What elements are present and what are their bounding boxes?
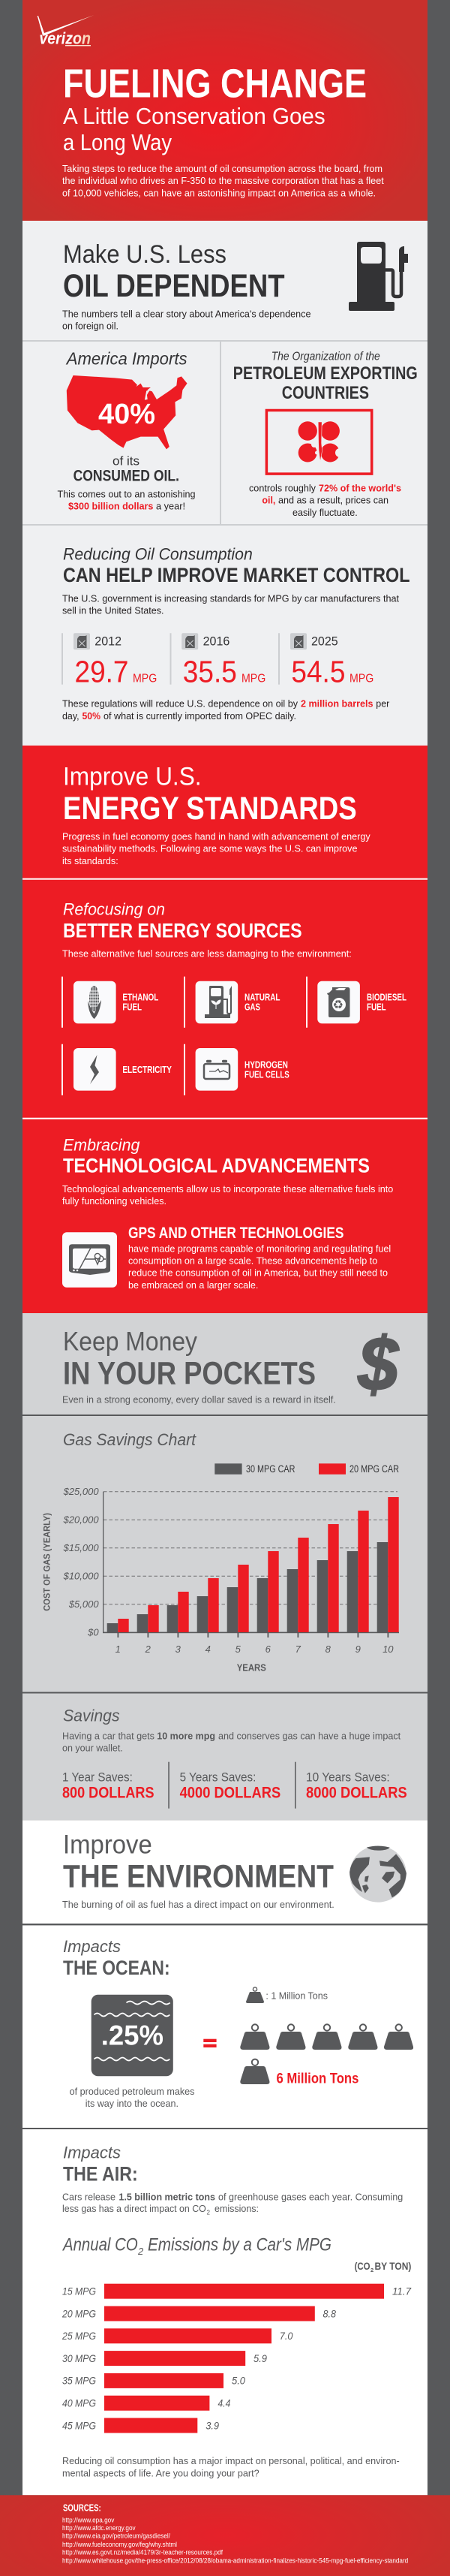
- text block: 1.5 billion metric tons: [118, 2191, 215, 2202]
- bar chart: CO2 emissions: 35 MPG: [62, 2375, 96, 2387]
- icon: fuel pump: [349, 242, 408, 311]
- bar chart: CO2 emissions: 45 MPG: [62, 2419, 96, 2431]
- stat: 2012: [62, 633, 157, 688]
- panel: savings: [62, 1707, 407, 1809]
- bar chart: CO2 emissions: 20 MPG: [62, 2307, 96, 2319]
- x axis labels: 10: [382, 1644, 394, 1655]
- stat: 2025: 2025: [311, 634, 338, 648]
- source list: http://www.fueleconomy.gov/feg/why.shtml: [62, 2541, 177, 2548]
- item: hydrogen fuel cells: HYDROGEN: [244, 1059, 288, 1070]
- text block: The burning of oil as fuel has a direct impact on our environment.: [62, 1899, 334, 1910]
- bar chart: CO2 emissions: 8.8: [322, 2307, 336, 2319]
- y axis labels: $20,000: [63, 1514, 99, 1526]
- caption: This comes out to an astonishing: [57, 489, 195, 500]
- text block: of greenhouse gases each year. Consuming: [218, 2191, 403, 2202]
- heading: [63, 1937, 170, 1979]
- text block: These alternative fuel sources are less damaging to the environment:: [62, 948, 352, 959]
- text block: of what is currently imported from OPEC daily.: [104, 710, 296, 722]
- heading: IN YOUR POCKETS: [63, 1355, 316, 1391]
- intro text: sustainability methods. Following are some ways the U.S. can improve: [62, 843, 357, 854]
- heading: ENERGY STANDARDS: [63, 791, 357, 827]
- text block: fully functioning vehicles.: [62, 1195, 166, 1207]
- item: electricity: [62, 1044, 172, 1095]
- bar chart: CO2 emissions: 4.4: [218, 2397, 230, 2409]
- y axis title: COST OF GAS (YEARLY): [42, 1513, 52, 1611]
- source list: [62, 2516, 408, 2565]
- heading: chart title: Emissions by a Car's MPG: [148, 2234, 332, 2255]
- caption: and as a result, prices can: [278, 495, 388, 506]
- text block: Cars release: [62, 2191, 116, 2202]
- caption: of produced petroleum makes: [70, 2086, 195, 2097]
- text block: sell in the United States.: [62, 604, 164, 616]
- stat: 1 year: [62, 1771, 154, 1801]
- text block: These regulations will reduce U.S. dependence on oil by: [62, 698, 298, 710]
- bar chart: CO2 emissions: 30 MPG: [62, 2352, 96, 2364]
- heading: [63, 545, 410, 586]
- icon: fuel can: [182, 633, 198, 649]
- x axis title: YEARS: [237, 1662, 266, 1673]
- item: biodiesel fuel: [306, 977, 406, 1028]
- icon: dollar sign: $: [358, 1322, 399, 1406]
- y axis labels: $0: [87, 1626, 99, 1638]
- stat: 10 years: 10 Years Saves:: [306, 1771, 390, 1785]
- legend: weight: [246, 1987, 328, 2003]
- x axis labels: 7: [296, 1644, 302, 1655]
- caption: its way into the ocean.: [86, 2098, 178, 2109]
- x axis labels: 9: [356, 1644, 361, 1655]
- intro text: Taking steps to reduce the amount of oil consumption across the board, from: [62, 163, 382, 174]
- item: natural gas: [184, 977, 280, 1028]
- callout: GPS: reduce the consumption of oil in America, but they still need to: [128, 1267, 388, 1279]
- heading: [63, 763, 357, 827]
- stat: .25%: .25%: [101, 2020, 164, 2050]
- panel: america imports: [57, 348, 195, 512]
- intro text: [62, 163, 384, 198]
- heading: [63, 1327, 316, 1391]
- panel: OPEC: [233, 350, 418, 518]
- icon: GPS device: [62, 1232, 117, 1288]
- heading: BETTER ENERGY SOURCES: [63, 919, 302, 942]
- heading: SOURCES:: [63, 2503, 101, 2514]
- chart unit label: 2: [370, 2267, 374, 2273]
- x axis labels: 1: [116, 1644, 121, 1655]
- text block: [62, 2191, 403, 2216]
- text block: on your wallet.: [62, 1743, 123, 1754]
- stat: 2016: MPG: [242, 672, 266, 685]
- icon: USA map: [67, 375, 188, 449]
- closing text: Reducing oil consumption has a major impact on personal, political, and environ-: [62, 2455, 400, 2466]
- source list: http://www.whitehouse.gov/the-press-office/2012/08/28/obama-administration-finalizes-historic-545-mpg-fuel-efficiency-standard: [62, 2557, 408, 2565]
- bar chart: CO2 emissions: 3.9: [206, 2419, 219, 2431]
- stat: 2025: [278, 633, 374, 688]
- panel: the ocean: [63, 1937, 413, 2109]
- caption: oil,: [262, 495, 275, 506]
- intro text: [62, 309, 310, 332]
- heading: Improve U.S.: [63, 763, 202, 791]
- stat: 5 years: 4000 DOLLARS: [180, 1784, 280, 1801]
- icon: fuel can: [74, 633, 90, 649]
- bar chart: CO2 emissions: 15 MPG: [62, 2285, 96, 2297]
- panel: keep money in your pockets: [22, 1313, 428, 1820]
- heading: [63, 1135, 370, 1177]
- callout: GPS: consumption on a large scale. These advancements help to: [128, 1255, 377, 1266]
- stat: 6 million tons: 6 Million Tons: [276, 2071, 358, 2086]
- heading: The Organization of the: [272, 350, 380, 363]
- heading: [233, 350, 418, 403]
- stat: 5 years: [180, 1771, 280, 1801]
- intro text: of 10,000 vehicles, can have an astonishing impact on America as a whole.: [62, 187, 376, 198]
- panel: the air: [62, 2144, 412, 2478]
- heading: THE ENVIRONMENT: [63, 1858, 334, 1894]
- chart unit label: BY TON): [375, 2260, 411, 2272]
- heading: THE AIR:: [63, 2162, 138, 2185]
- item: electricity: ELECTRICITY: [122, 1064, 172, 1075]
- heading: Embracing: [63, 1135, 140, 1154]
- caption: CONSUMED OIL.: [74, 468, 179, 485]
- y axis labels: $15,000: [63, 1542, 99, 1553]
- stat: 2016: 2016: [203, 634, 230, 648]
- heading: [63, 1830, 334, 1894]
- callout: GPS: GPS AND OTHER TECHNOLOGIES: [128, 1225, 344, 1242]
- panel: improve the environment: [22, 1820, 428, 2495]
- intro text: [62, 831, 370, 866]
- heading: Improve: [63, 1830, 152, 1859]
- x axis labels: 2: [145, 1644, 152, 1655]
- caption: [249, 483, 401, 518]
- text block: Technological advancements allow us to incorporate these alternative fuels into: [62, 1183, 393, 1195]
- source list: http://www.eia.gov/petroleum/gasdiesel/: [62, 2532, 170, 2540]
- intro text: Progress in fuel economy goes hand in hand with advancement of energy: [62, 831, 370, 842]
- source list: http://www.epa.gov: [62, 2516, 115, 2523]
- item: biodiesel fuel: FUEL: [367, 1002, 386, 1013]
- bar chart: CO2 emissions: 11.7: [392, 2285, 412, 2297]
- text block: Having a car that gets: [62, 1730, 154, 1741]
- stat: 2016: 35.5: [183, 654, 237, 688]
- heading: Refocusing on: [63, 900, 165, 919]
- y axis labels: $10,000: [63, 1571, 99, 1582]
- x axis labels: 4: [206, 1644, 211, 1655]
- stat: 5 years: 5 Years Saves:: [180, 1771, 256, 1785]
- text block: 10 more mpg: [157, 1730, 215, 1741]
- heading: Impacts: [63, 1937, 121, 1956]
- panel: header: [22, 0, 428, 221]
- intro text: the individual who drives an F-350 to the massive corporation that has a fleet: [62, 175, 384, 186]
- item: ethanol fuel: ETHANOL: [122, 992, 158, 1003]
- callout: GPS: be embraced on a larger scale.: [128, 1279, 258, 1291]
- icon row: six weights: [240, 2024, 413, 2084]
- heading: America Imports: [65, 348, 188, 368]
- y axis labels: $25,000: [63, 1486, 99, 1497]
- x axis labels: [116, 1644, 394, 1655]
- bar chart: CO2 emissions: 5.0: [232, 2375, 245, 2387]
- bar chart: CO2 emissions: [62, 2284, 412, 2433]
- closing text: [62, 2455, 400, 2478]
- text block: less gas has a direct impact on CO: [62, 2203, 206, 2214]
- equals sign: [203, 2039, 217, 2047]
- icon: fuel can: [290, 633, 307, 649]
- text block: and conserves gas can have a huge impact: [218, 1730, 401, 1741]
- subtitle: a Long Way: [63, 129, 172, 155]
- heading: chart title: [62, 2234, 332, 2257]
- x axis labels: 6: [266, 1644, 272, 1655]
- heading: [63, 240, 285, 304]
- panel: better energy sources: [62, 900, 406, 1095]
- caption: of its: [112, 453, 140, 468]
- icon: gas pump with leaf: [205, 986, 232, 1018]
- panel: market control: [62, 545, 410, 722]
- item: hydrogen fuel cells: [184, 1044, 290, 1095]
- heading: OIL DEPENDENT: [63, 268, 285, 304]
- item: hydrogen fuel cells: FUEL CELLS: [244, 1068, 290, 1080]
- heading: Keep Money: [63, 1327, 197, 1356]
- icon: globe: [350, 1845, 406, 1903]
- legend: 20 MPG CAR: [350, 1463, 399, 1475]
- intro text: on foreign oil.: [62, 321, 118, 332]
- heading: COUNTRIES: [282, 383, 369, 403]
- text block: 2: [207, 2209, 210, 2216]
- stat: 1 year: 800 DOLLARS: [62, 1784, 154, 1801]
- text block: [62, 1730, 401, 1754]
- bar chart: CO2 emissions: 25 MPG: [62, 2330, 96, 2342]
- heading: THE OCEAN:: [63, 1957, 170, 1979]
- icon: corn: [88, 986, 101, 1019]
- title: FUELING CHANGE: [63, 61, 367, 106]
- heading: Make U.S. Less: [63, 240, 226, 269]
- bar chart: [42, 1486, 399, 1673]
- bar chart: CO2 emissions: 40 MPG: [62, 2397, 96, 2409]
- panel: technological advancements: [62, 1135, 393, 1291]
- stat: 10 years: [306, 1771, 407, 1801]
- stat: 2012: 2012: [94, 634, 122, 648]
- stat: 40%: 40%: [98, 399, 155, 430]
- closing text: mental aspects of life. Are you doing your part?: [62, 2467, 260, 2478]
- heading: [63, 2144, 138, 2185]
- legend: [214, 1463, 399, 1475]
- callout: GPS: have made programs capable of monitoring and regulating fuel: [128, 1243, 391, 1254]
- heading: TECHNOLOGICAL ADVANCEMENTS: [63, 1155, 370, 1177]
- stat: 2012: MPG: [133, 672, 157, 685]
- verizon logo: [38, 15, 94, 47]
- chart unit label: [355, 2260, 411, 2273]
- icon: lightning bolt: [90, 1055, 99, 1084]
- heading: Impacts: [63, 2144, 121, 2162]
- x axis labels: 8: [326, 1644, 332, 1655]
- stat: 2016: [170, 633, 266, 688]
- stat: 1 year: 1 Year Saves:: [62, 1771, 133, 1785]
- intro text: The numbers tell a clear story about America's dependence: [62, 309, 310, 320]
- heading: chart title: Annual CO: [62, 2234, 138, 2255]
- text block: day,: [62, 710, 80, 722]
- item: ethanol fuel: [62, 977, 158, 1028]
- source list: http://www.es.govt.nz/media/4179/3r-teacher-resources.pdf: [62, 2548, 223, 2556]
- legend: 30 MPG CAR: [246, 1463, 296, 1475]
- heading: Reducing Oil Consumption: [63, 545, 253, 564]
- legend: weight: : 1 Million Tons: [266, 1990, 328, 2002]
- dividers: [22, 340, 428, 526]
- caption: 72% of the world's: [319, 483, 401, 494]
- x axis labels: 5: [236, 1644, 242, 1655]
- text block: 50%: [82, 710, 100, 722]
- subtitle: [63, 103, 326, 155]
- item: biodiesel fuel: BIODIESEL: [367, 992, 406, 1003]
- icon: OPEC flag: [266, 410, 372, 474]
- caption: easily fluctuate.: [292, 507, 358, 518]
- bar chart: CO2 emissions: 7.0: [280, 2330, 293, 2342]
- item: ethanol fuel: FUEL: [122, 1002, 142, 1013]
- caption: [57, 453, 195, 512]
- text block: per: [376, 698, 390, 710]
- heading: Gas Savings Chart: [63, 1430, 197, 1449]
- text block: 2 million barrels: [301, 698, 374, 710]
- y axis labels: $5,000: [68, 1598, 99, 1610]
- subtitle: A Little Conservation Goes: [63, 103, 326, 129]
- panel: improve energy standards: [22, 746, 428, 1313]
- intro text: its standards:: [62, 855, 118, 866]
- item: natural gas: NATURAL: [244, 992, 280, 1003]
- caption: a year!: [156, 501, 185, 512]
- text block: [62, 698, 390, 722]
- item: natural gas: GAS: [244, 1002, 260, 1013]
- heading: chart title: 2: [137, 2246, 144, 2257]
- caption: [70, 2086, 195, 2109]
- text block: [62, 1183, 393, 1207]
- chart unit label: (CO: [355, 2260, 370, 2272]
- source list: http://www.afdc.energy.gov: [62, 2524, 136, 2532]
- text block: [62, 592, 399, 616]
- panel: make U.S. less oil dependent: [22, 221, 428, 746]
- text block: emissions:: [214, 2203, 259, 2214]
- text block: The U.S. government is increasing standards for MPG by car manufacturers that: [62, 592, 399, 604]
- icon: ocean stat: [92, 1995, 173, 2076]
- icon: biodiesel can: ♻: [333, 997, 344, 1012]
- x axis labels: 3: [176, 1644, 182, 1655]
- caption: controls roughly: [249, 483, 316, 494]
- panel: sources footer: [0, 2495, 450, 2576]
- icon: battery: [204, 1060, 230, 1079]
- caption: $300 billion dollars: [68, 501, 153, 512]
- heading: Savings: [63, 1707, 120, 1725]
- callout: GPS: [128, 1225, 391, 1291]
- heading: [63, 900, 302, 942]
- stat: 2025: 54.5: [291, 654, 345, 688]
- bar chart: CO2 emissions: 5.9: [254, 2352, 267, 2364]
- verizon logo: verizon: [39, 29, 91, 47]
- stat: 2025: MPG: [350, 672, 374, 685]
- stat: 10 years: 8000 DOLLARS: [306, 1784, 407, 1801]
- text block: Even in a strong economy, every dollar saved is a reward in itself.: [62, 1393, 336, 1405]
- y axis labels: [63, 1486, 99, 1638]
- stat: 2012: 29.7: [75, 654, 129, 688]
- panel: gas savings chart: [42, 1430, 399, 1673]
